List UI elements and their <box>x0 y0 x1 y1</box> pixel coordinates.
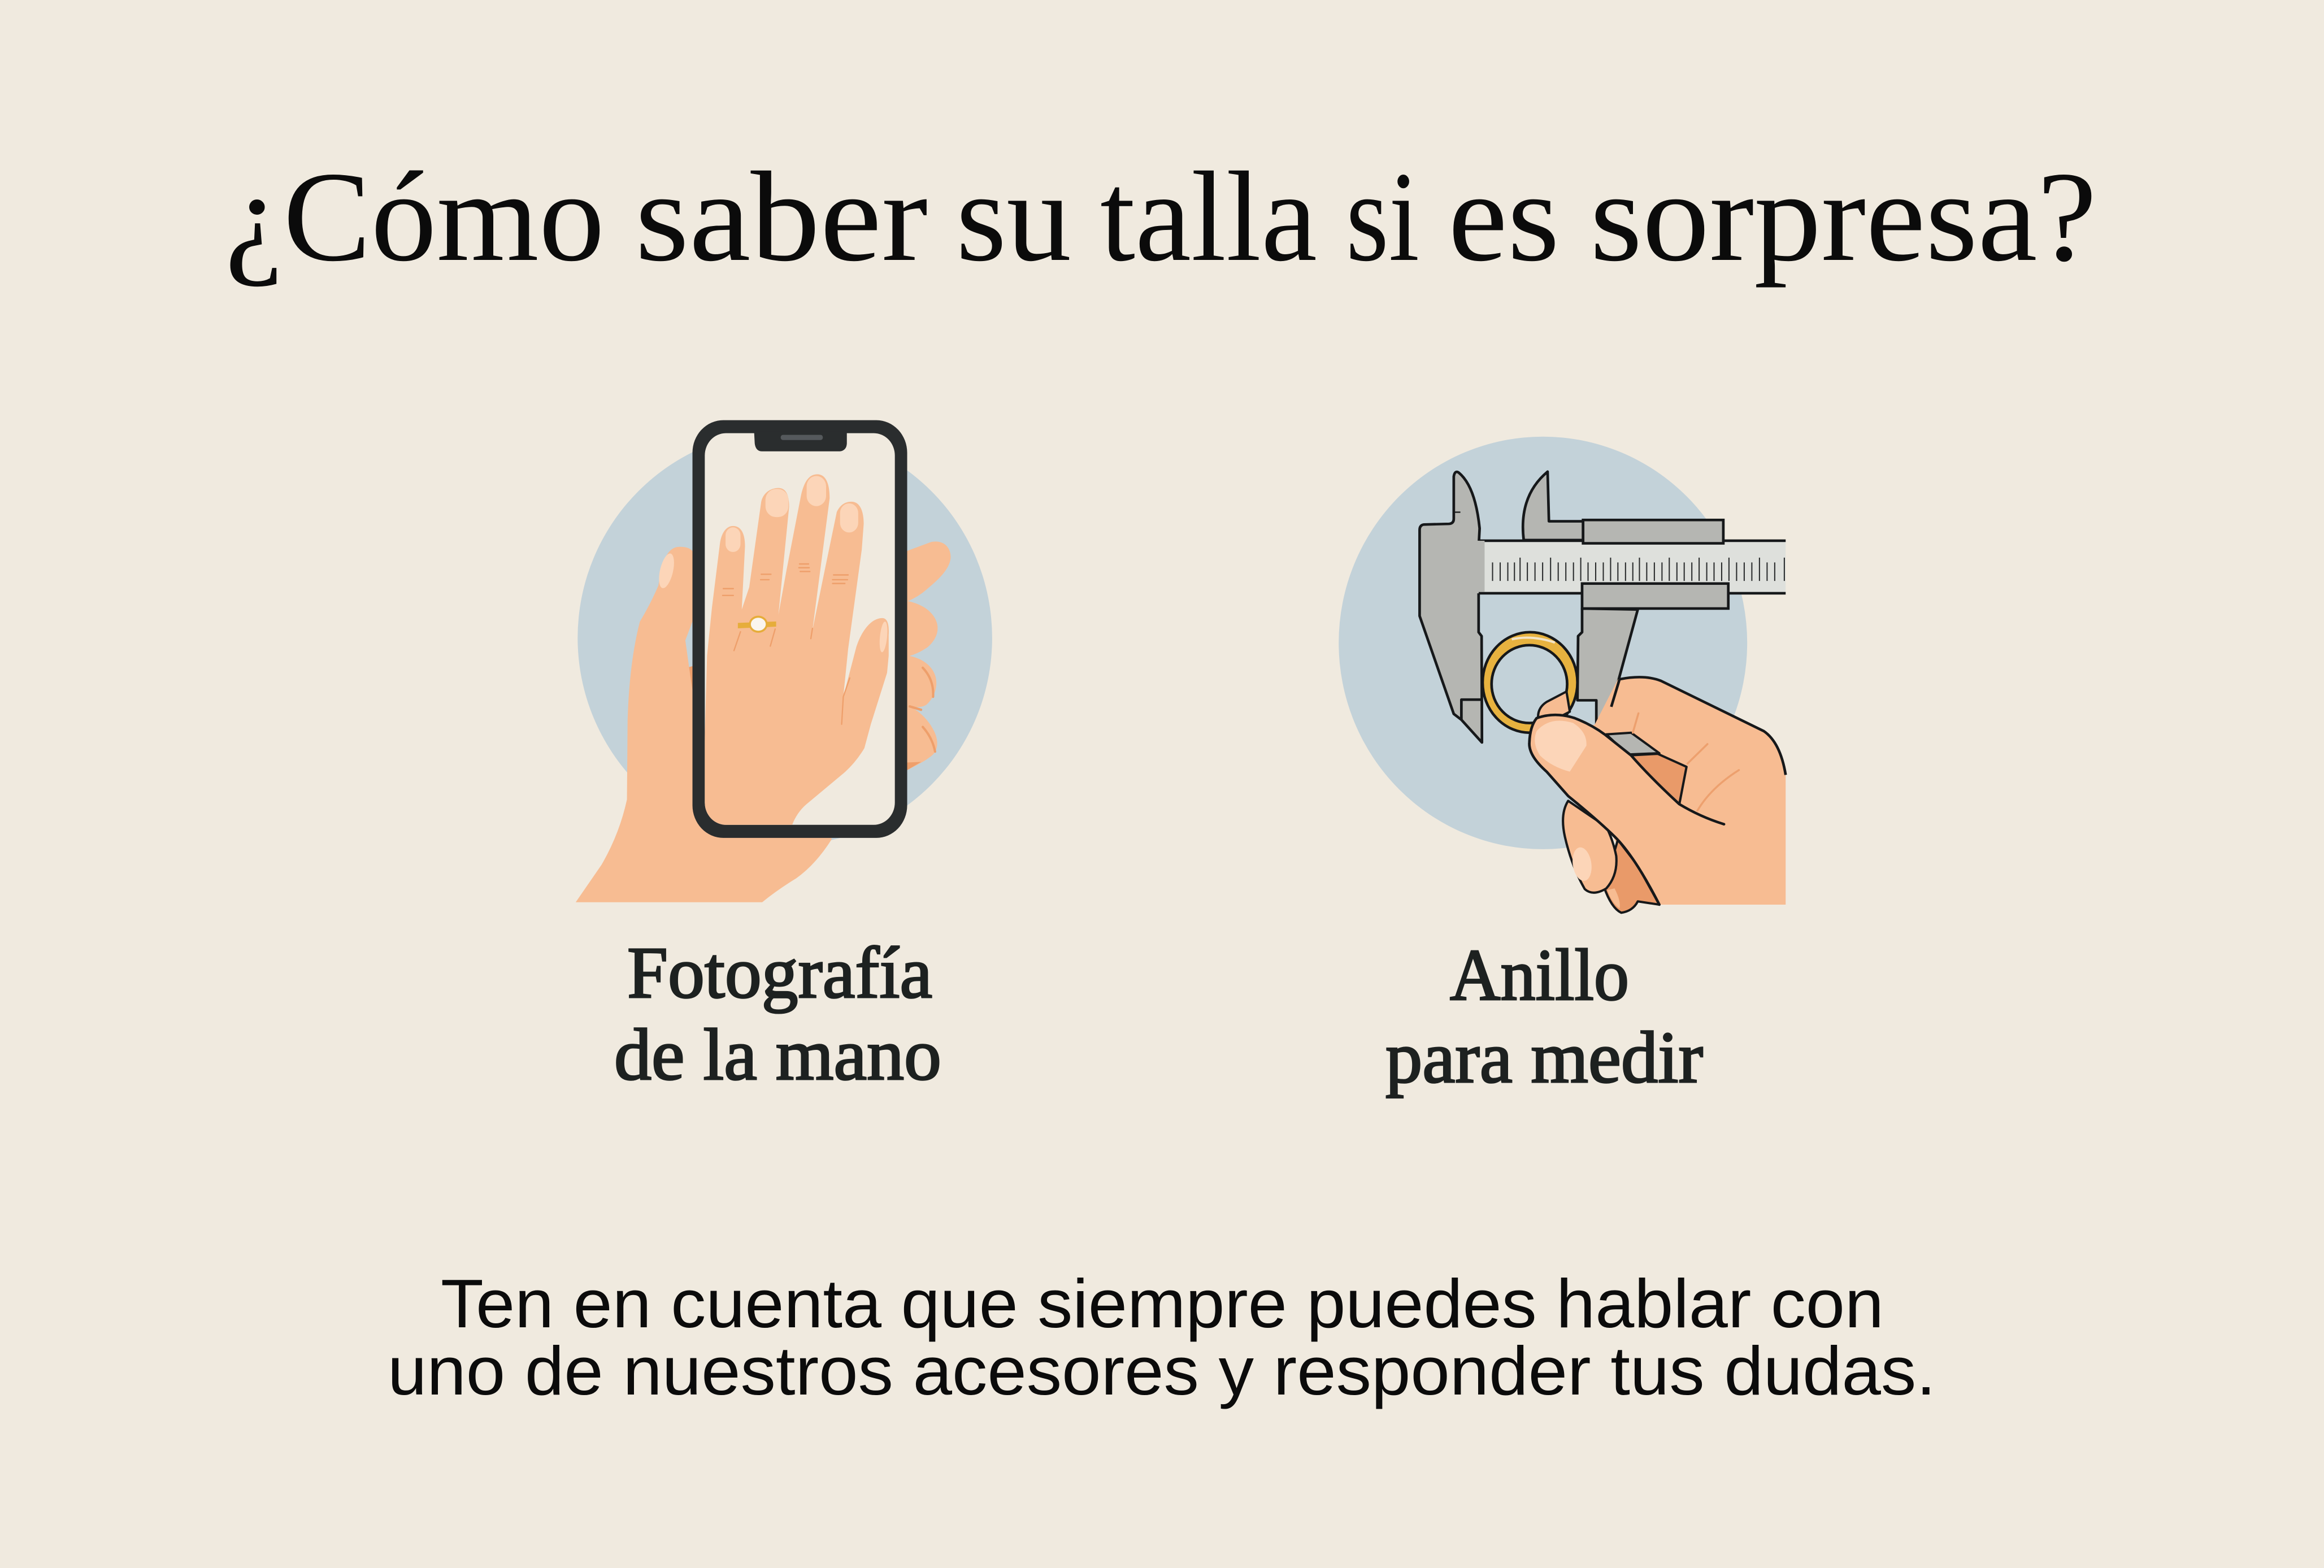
skin creases <box>1633 713 1739 811</box>
title: talla <box>1100 146 1317 288</box>
footer note: uno de nuestros acesores y responder tus dudas. <box>388 1332 1936 1409</box>
label: Fotografía de la mano: Fotografía <box>627 932 932 1014</box>
label: Anillo para medir: para medir <box>1385 1017 1703 1098</box>
title: saber <box>635 146 928 288</box>
lower fingers <box>1604 840 1660 913</box>
screen hand nails <box>726 476 889 653</box>
title: si <box>1346 146 1419 288</box>
knuckle creases <box>723 564 850 724</box>
footer note: Ten en cuenta que siempre puedes hablar con <box>441 1265 1884 1342</box>
phone screen <box>705 433 895 825</box>
ruler ticks <box>1493 558 1784 581</box>
title: es <box>1448 146 1560 288</box>
title: sorpresa? <box>1590 146 2097 288</box>
phone speaker <box>781 435 823 440</box>
footer note <box>388 1265 1936 1409</box>
label: Fotografía de la mano <box>614 932 941 1096</box>
phone notch <box>754 432 847 451</box>
blue circle <box>1339 437 1747 849</box>
caliper beam <box>1479 541 1786 593</box>
thumb nail <box>1535 721 1587 772</box>
upper slider <box>1583 520 1723 544</box>
label: Anillo para medir <box>1385 935 1703 1098</box>
upper movable jaw <box>1523 472 1583 540</box>
lower slider <box>1582 584 1728 609</box>
title: ¿Cómo <box>225 146 605 288</box>
ring finger tip behind the ring <box>1538 692 1570 726</box>
gold ring <box>1483 632 1578 733</box>
finger shadows <box>910 668 935 752</box>
hand holding the ring <box>1530 677 1786 913</box>
caliper tail under thumb <box>1606 733 1660 754</box>
ring on the finger <box>738 616 776 633</box>
illustration: phone photographing a hand <box>576 420 992 902</box>
holding hand <box>576 547 832 902</box>
fingers behind the phone <box>903 541 950 772</box>
title <box>225 146 2097 288</box>
palm shadow <box>1628 754 1687 805</box>
back of hand <box>1532 677 1786 905</box>
label: Anillo para medir: Anillo <box>1450 935 1629 1016</box>
lower movable jaw <box>1578 609 1638 724</box>
illustration: caliper measuring a ring <box>1339 437 1786 913</box>
thumb nail <box>656 552 677 590</box>
hand on the screen <box>702 474 889 827</box>
title: su <box>956 146 1071 288</box>
thumb <box>1530 715 1724 905</box>
label: Fotografía de la mano: de la mano <box>614 1014 941 1096</box>
fixed jaw <box>1419 472 1484 742</box>
phone body <box>693 420 907 838</box>
blue circle <box>577 431 992 845</box>
